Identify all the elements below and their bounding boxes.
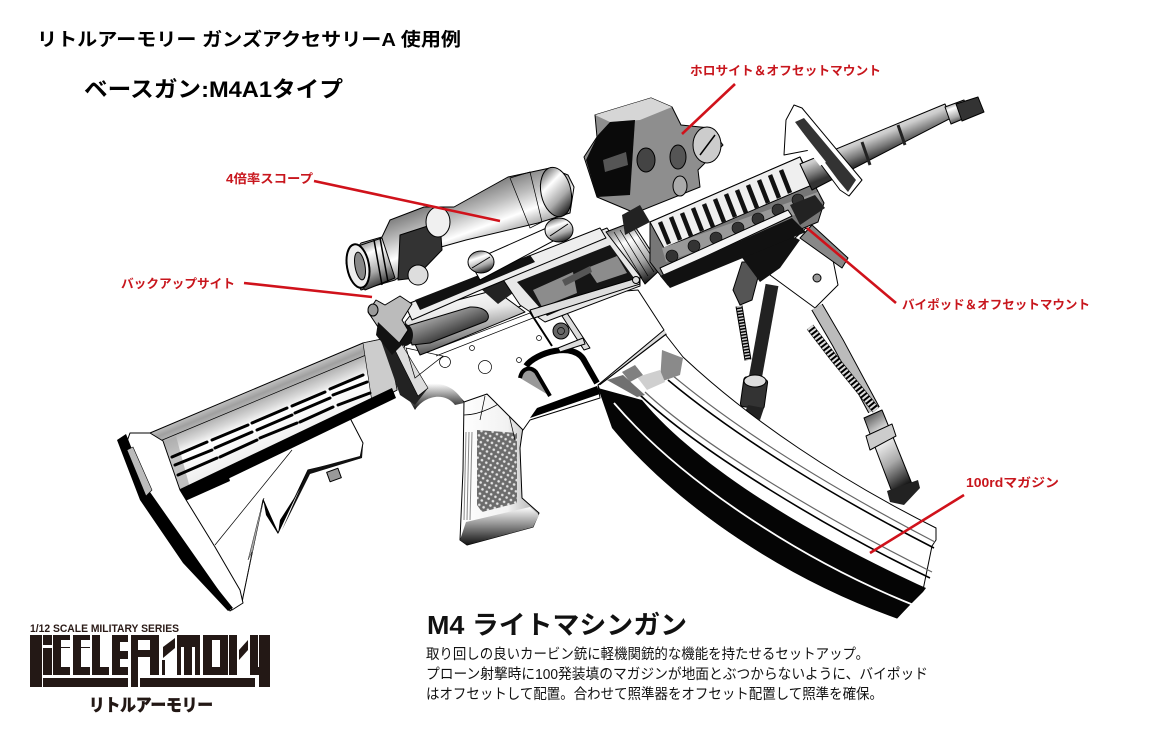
description text — [426, 646, 928, 703]
barrel and front sight — [784, 97, 984, 196]
castle ring — [378, 330, 428, 405]
butt plate — [125, 433, 243, 610]
label: 100rd magazine — [870, 475, 1059, 553]
description text: プローン射撃時に100発装填のマガジンが地面とぶつからないように、バイポッド — [426, 666, 928, 683]
heading: M4 light machine gun: M4 ライトマシンガン — [427, 610, 687, 640]
holographic sight and offset mount — [584, 98, 723, 235]
description text: 取り回しの良いカービン銃に軽機関銃的な機能を持たせるセットアップ。 — [426, 646, 869, 663]
label: holographic sight — [682, 64, 881, 134]
logo: Little Armory: リトルアーモリー — [89, 696, 213, 715]
illustration: M4 light machine gun — [117, 97, 984, 618]
4x scope — [343, 164, 606, 320]
upper receiver — [397, 228, 640, 355]
label: 100rd magazine: 100rdマガジン — [966, 475, 1059, 490]
label: 4x scope — [226, 171, 500, 221]
label: bipod and offset mount — [807, 228, 1090, 312]
stock — [117, 338, 397, 611]
title: リトルアーモリー ガンズアクセサリーA 使用例 — [37, 29, 461, 50]
label: bipod and offset mount: バイポッド＆オフセットマウント — [902, 297, 1090, 312]
bipod right leg — [817, 307, 874, 410]
logo: Little Armory — [30, 623, 270, 715]
lower receiver — [378, 290, 664, 430]
magazine — [598, 332, 936, 618]
backup sight — [368, 296, 412, 355]
label: 4x scope: 4倍率スコープ — [226, 171, 314, 186]
label: holographic sight: ホロサイト＆オフセットマウント — [690, 64, 881, 78]
logo: Little Armory: 1/12 SCALE MILITARY SERIES — [30, 623, 179, 635]
bipod — [733, 225, 920, 505]
stock slots — [172, 375, 370, 475]
description text: はオフセットして配置。合わせて照準器をオフセット配置して照準を確保。 — [426, 686, 883, 703]
pistol grip — [460, 394, 539, 545]
subtitle: base gun: ベースガン:M4A1タイプ — [84, 77, 343, 102]
handguard and gas ring — [606, 157, 825, 288]
label: backup sight: バックアップサイト — [121, 277, 235, 291]
label: backup sight — [121, 277, 372, 297]
